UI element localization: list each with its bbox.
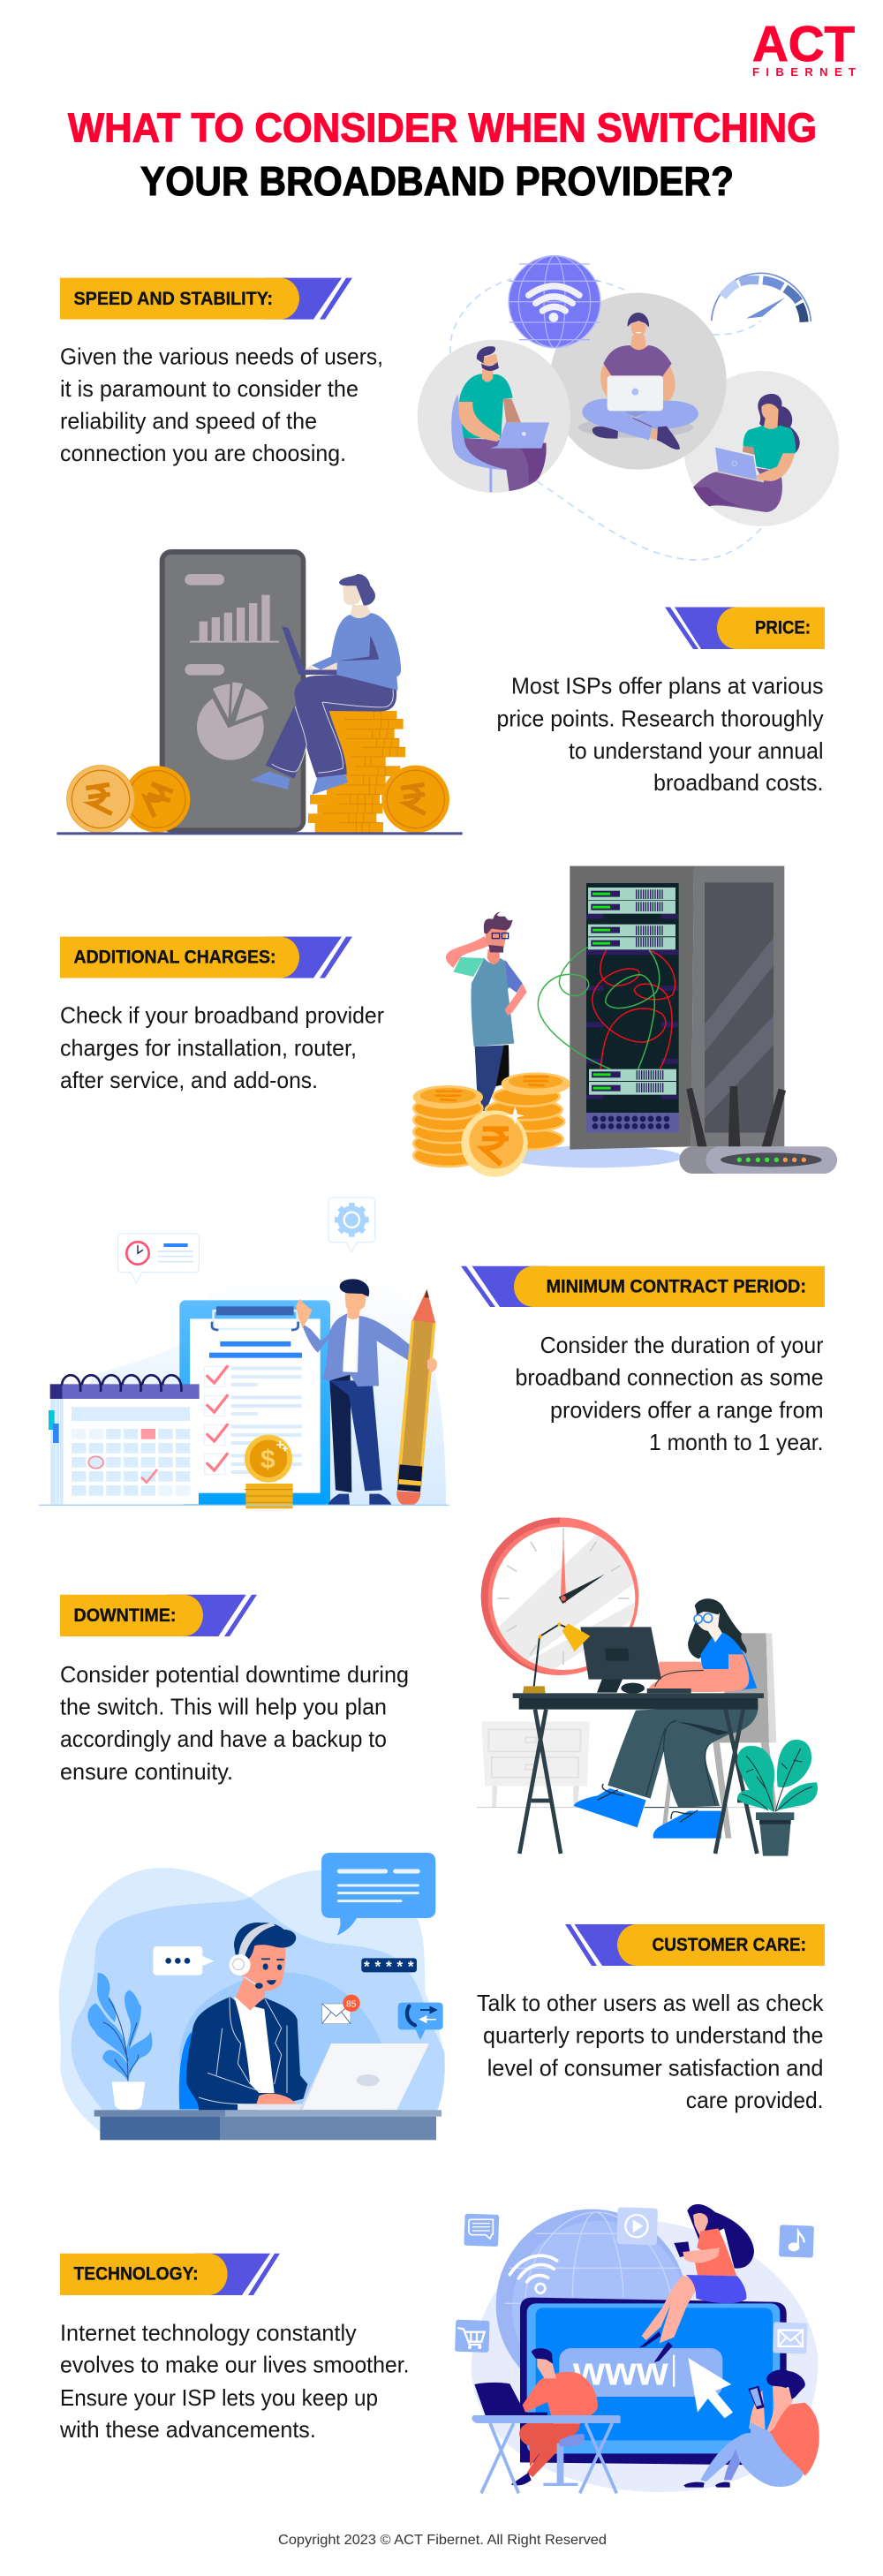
text: customer care: Talk to other users as well as check	[477, 1990, 824, 2016]
icon: pencil	[396, 1289, 437, 1506]
cabinet	[481, 1721, 590, 1808]
text: downtime: Consider potential downtime during	[60, 1661, 409, 1688]
router	[679, 1086, 837, 1174]
search bar: www	[572, 2349, 669, 2394]
text: technology: Internet technology constantly	[60, 2319, 357, 2346]
person: right woman with laptop	[693, 394, 800, 512]
coin: rupee centre	[124, 766, 190, 833]
coin stack	[308, 711, 405, 833]
logo: ACT Fibernet: FIBERNET	[752, 65, 856, 79]
icon: speed gauge	[712, 273, 811, 322]
chair	[662, 1633, 777, 1839]
desk	[94, 2110, 442, 2140]
text: technology	[59, 2319, 410, 2443]
illustration: three people online with wifi globe and speed gauge	[418, 256, 839, 560]
text: minimum contract period: providers offer a range from	[550, 1396, 823, 1423]
person: confused man	[446, 912, 527, 1111]
title	[68, 105, 817, 204]
speech bubble: dots	[153, 1946, 215, 1975]
badge: downtime: DOWNTIME:	[74, 1605, 177, 1626]
text: price	[496, 673, 823, 796]
icon: desk lamp	[523, 1622, 590, 1693]
laptop	[299, 2043, 429, 2110]
icon: envelope with notification badge: 85	[346, 1999, 357, 2009]
text: price: to understand your annual	[569, 737, 823, 764]
text: additional charges: charges for installation, router,	[60, 1035, 357, 1061]
chart: pie on phone	[185, 664, 268, 760]
icon: envelope with notification badge	[322, 1995, 360, 2024]
badge: additional charges: ADDITIONAL CHARGES:	[74, 946, 275, 967]
text: minimum contract period: 1 month to 1 year.	[649, 1429, 823, 1455]
text: customer care: care provided.	[686, 2087, 823, 2113]
person: woman at computer	[574, 1598, 758, 1839]
person: man at desk	[472, 2348, 621, 2493]
coins: left stack	[413, 1086, 482, 1167]
illustration: confused man, server rack, coins and router	[413, 866, 837, 1177]
illustration: people using the internet around a big screen	[455, 2204, 819, 2493]
text: speed and stability: connection you are choosing.	[60, 440, 346, 466]
badge: minimum contract period	[461, 1266, 825, 1307]
text: technology: Ensure your ISP lets you keep up	[60, 2384, 378, 2411]
badge: minimum contract period: MINIMUM CONTRACT PERIOD:	[547, 1275, 806, 1296]
text: downtime	[60, 1661, 409, 1785]
text: downtime: accordingly and have a backup to	[60, 1726, 387, 1752]
person: left man with laptop	[451, 346, 549, 492]
coins: right stack	[486, 1074, 569, 1150]
text: minimum contract period	[516, 1332, 824, 1455]
icon: message tile	[464, 2214, 499, 2247]
icon: cart tile	[455, 2320, 490, 2353]
title: WHAT TO CONSIDER WHEN SWITCHING	[68, 105, 817, 151]
text: additional charges: after service, and add-ons.	[60, 1067, 318, 1093]
icon: mail tile	[773, 2322, 808, 2354]
icon: gear speech bubble	[328, 1197, 375, 1252]
coin: rupee right	[381, 766, 449, 833]
text: additional charges	[60, 1002, 384, 1093]
icon: potted plant	[737, 1740, 818, 1856]
text: price: broadband costs.	[653, 769, 823, 796]
text: downtime: the switch. This will help you plan	[60, 1694, 387, 1720]
coin: large rupee	[461, 1107, 528, 1177]
icon: play tile	[616, 2207, 658, 2245]
monitor	[520, 2298, 787, 2466]
illustration: man with checklist, calendar and pencil	[39, 1197, 449, 1508]
agent chair	[179, 2032, 199, 2109]
text: minimum contract period: Consider the duration of your	[540, 1332, 824, 1358]
badge: downtime	[60, 1595, 257, 1636]
text: technology: with these advancements.	[59, 2416, 316, 2443]
badge: speed and stability: SPEED AND STABILITY:	[74, 288, 273, 309]
icon: clock speech bubble	[117, 1234, 199, 1283]
text: minimum contract period: broadband connection as some	[516, 1364, 823, 1391]
logo: ACT Fibernet: ACT	[752, 16, 855, 72]
icon: wifi	[509, 2255, 557, 2293]
icon: music tile	[779, 2225, 814, 2258]
calendar	[49, 1375, 200, 1504]
person: centre man cross-legged	[578, 313, 698, 449]
server rack	[538, 866, 784, 1150]
text: additional charges: Check if your broadband provider	[60, 1002, 384, 1029]
computer monitor	[580, 1627, 691, 1694]
clipboard checklist	[179, 1300, 330, 1505]
icon: phone speech bubble	[398, 2003, 443, 2040]
icon: wifi globe	[509, 256, 600, 348]
text: price: Most ISPs offer plans at various	[511, 673, 823, 699]
icon: plant on desk	[87, 1973, 152, 2110]
globe	[496, 2210, 687, 2400]
text: customer care	[477, 1990, 824, 2113]
desk	[513, 1693, 764, 1854]
person: customer care agent	[186, 1923, 307, 2110]
coin: dollar on stack	[245, 1435, 294, 1508]
badge: customer care	[565, 1924, 825, 1966]
coin: dollar on stack: $	[260, 1446, 275, 1475]
text: price: price points. Research thoroughly	[496, 705, 823, 731]
badge: speed and stability	[60, 278, 352, 320]
text: downtime: ensure continuity.	[60, 1758, 233, 1785]
illustration: woman at desk under a large clock	[477, 1517, 818, 1856]
icon: cursor arrow	[688, 2358, 733, 2418]
person: man giving ok sign with pencil	[296, 1279, 412, 1506]
icon: wall clock	[481, 1517, 651, 1675]
illustration: woman sitting on coin stack beside a phone with charts	[57, 549, 463, 835]
speech bubble: message	[321, 1853, 435, 1936]
title: YOUR BROADBAND PROVIDER?	[140, 158, 734, 204]
badge: customer care: CUSTOMER CARE:	[652, 1934, 806, 1955]
badge: technology: TECHNOLOGY:	[74, 2262, 198, 2284]
text: customer care: quarterly reports to understand the	[483, 2022, 823, 2049]
text: technology: evolves to make our lives smoother.	[60, 2352, 410, 2378]
text: customer care: level of consumer satisfaction and	[487, 2055, 823, 2081]
badge: additional charges	[60, 937, 352, 978]
coin: rupee left	[67, 766, 134, 833]
illustration: customer care agent	[59, 1853, 445, 2140]
copyright: Copyright 2023 © ACT Fibernet. All Right Reserved	[278, 2533, 607, 2548]
chart: bars on phone	[185, 574, 279, 643]
person: woman sitting on monitor	[639, 2204, 754, 2362]
search bar	[559, 2348, 722, 2397]
text: speed and stability	[60, 343, 383, 466]
red and green cables	[538, 947, 675, 1069]
text: speed and stability: it is paramount to consider the	[60, 375, 358, 402]
person: man with phone on floor	[683, 2369, 819, 2488]
badge: technology	[60, 2254, 280, 2295]
person: woman with laptop	[250, 574, 401, 795]
badge: price	[665, 608, 825, 649]
badge: price: PRICE:	[755, 617, 811, 638]
text: speed and stability: reliability and speed of the	[60, 408, 317, 434]
text: speed and stability: Given the various needs of users,	[60, 343, 383, 369]
password field: *****	[364, 1958, 414, 1975]
